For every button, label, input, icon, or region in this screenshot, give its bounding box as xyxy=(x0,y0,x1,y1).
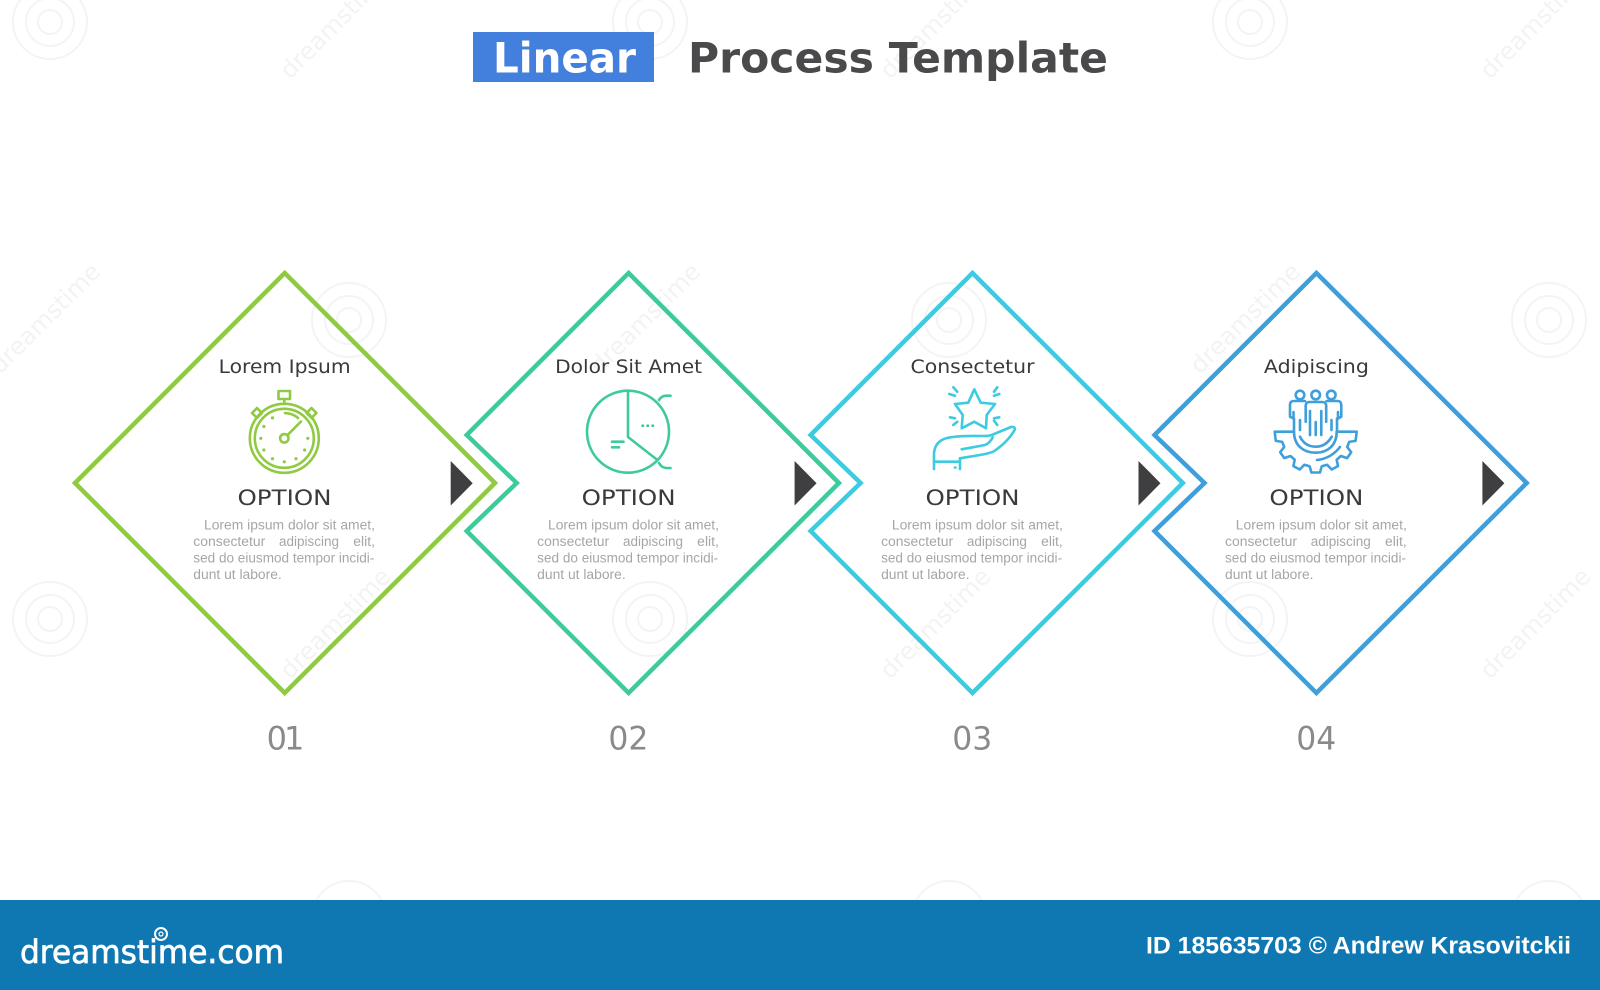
footer logo: dreamstime.com: dreamstime.com xyxy=(20,933,284,971)
number 03: 03 xyxy=(952,720,992,758)
icon: pie chart xyxy=(587,391,670,473)
body text 4: dunt ut labore. xyxy=(1225,567,1314,582)
number 04: 04 xyxy=(1296,720,1336,758)
panel: step 1 xyxy=(75,273,495,758)
body text 2: Lorem ipsum dolor sit amet, xyxy=(548,517,719,532)
option label 3: OPTION xyxy=(926,486,1020,511)
body text 2: elit, xyxy=(697,534,719,549)
icon: hand with star xyxy=(934,387,1015,469)
body text 2: consectetur xyxy=(537,534,610,549)
panel: step 2 xyxy=(467,273,839,758)
body text 1: sed do eiusmod tempor incidi- xyxy=(193,551,374,566)
body text 3: Lorem ipsum dolor sit amet, xyxy=(892,517,1063,532)
body text 2: dunt ut labore. xyxy=(537,567,626,582)
heading 1: Lorem Ipsum xyxy=(219,356,351,378)
diamond outline 1 xyxy=(75,273,495,693)
title text: Process Template: Process Template xyxy=(688,34,1108,82)
watermark pattern: dreamstime xyxy=(1184,258,1306,379)
body text 1: dunt ut labore. xyxy=(193,567,282,582)
footer credit: ID 185635703 © Andrew Krasovitckii xyxy=(1146,932,1571,960)
arrow 2 xyxy=(795,461,817,506)
heading 3: Consectetur xyxy=(910,356,1035,378)
body text 2: sed do eiusmod tempor incidi- xyxy=(537,551,718,566)
body text 3: elit, xyxy=(1041,534,1063,549)
title xyxy=(473,32,1108,82)
body text 3: dunt ut labore. xyxy=(881,567,970,582)
body text 4: sed do eiusmod tempor incidi- xyxy=(1225,551,1406,566)
body text 4: elit, xyxy=(1385,534,1407,549)
option label 4: OPTION xyxy=(1269,486,1363,511)
body text 1: consectetur xyxy=(193,534,266,549)
body text 3: consectetur xyxy=(881,534,954,549)
option label 2: OPTION xyxy=(582,486,676,511)
body text 3: sed do eiusmod tempor incidi- xyxy=(881,551,1062,566)
arrow 3 xyxy=(1138,461,1160,506)
arrow 4 xyxy=(1482,461,1504,506)
body text 2: adipiscing xyxy=(623,534,683,549)
panel: step 3 xyxy=(811,273,1183,758)
body text 4 xyxy=(1225,517,1407,582)
diamond outline 3 xyxy=(811,273,1183,693)
icon: stopwatch xyxy=(250,391,319,473)
option label 1: OPTION xyxy=(238,486,332,511)
diamond outline 4 xyxy=(1154,273,1527,693)
body text 4: Lorem ipsum dolor sit amet, xyxy=(1236,517,1407,532)
watermark pattern: dreamstime xyxy=(874,563,996,684)
number 02: 02 xyxy=(608,720,648,758)
watermark pattern: dreamstime xyxy=(1474,563,1596,684)
body text 2 xyxy=(537,517,719,582)
body text 3 xyxy=(881,517,1063,582)
body text 1: elit, xyxy=(353,534,375,549)
body text 4: adipiscing xyxy=(1311,534,1371,549)
body text 3: adipiscing xyxy=(967,534,1027,549)
body text 1 xyxy=(193,517,375,582)
title highlight: Linear: Linear xyxy=(493,34,636,82)
panel: step 4 xyxy=(1154,273,1527,758)
number 01: 01 xyxy=(267,720,302,758)
watermark pattern: dreamstime xyxy=(584,258,706,379)
body text 1: Lorem ipsum dolor sit amet, xyxy=(204,517,375,532)
body text 4: consectetur xyxy=(1225,534,1298,549)
diamond outline 2 xyxy=(467,273,839,693)
footer bar xyxy=(0,900,1600,990)
heading 2: Dolor Sit Amet xyxy=(555,356,702,378)
icon: team on gear xyxy=(1275,391,1357,472)
watermark pattern: dreamstime xyxy=(274,563,396,684)
body text 1: adipiscing xyxy=(279,534,339,549)
heading 4: Adipiscing xyxy=(1264,356,1369,378)
arrow 1 xyxy=(451,461,473,506)
